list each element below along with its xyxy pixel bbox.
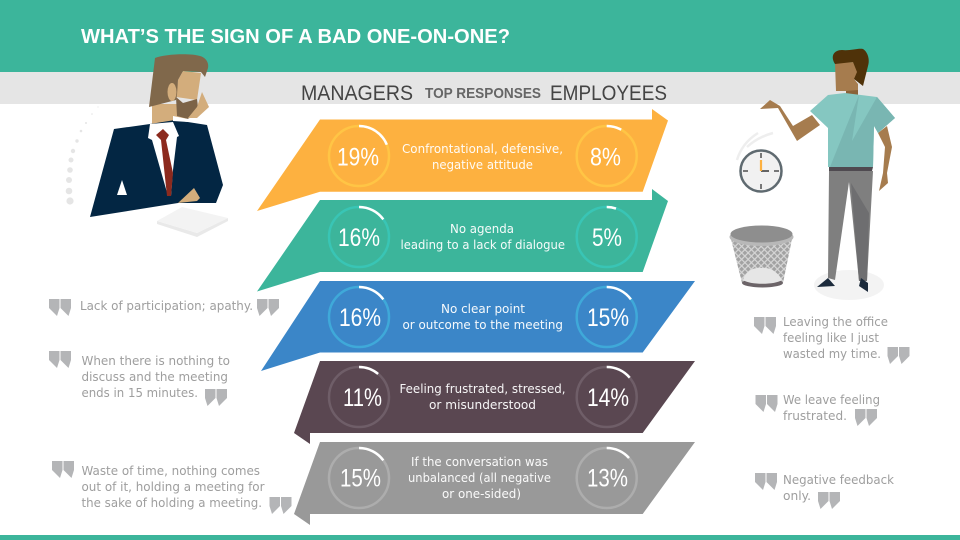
ring: employees 5% — [577, 207, 637, 267]
ring: employees 14%: 14% — [587, 384, 629, 412]
icon: clock — [737, 133, 782, 192]
subheader band — [0, 72, 960, 104]
heading: managers: MANAGERS — [301, 82, 413, 105]
quote: nothing to discuss — [49, 351, 230, 406]
label: No clear point — [441, 302, 525, 316]
label: or misunderstood — [429, 398, 536, 412]
banner: feeling frustrated — [294, 361, 695, 444]
quote: negative feedback: only. — [783, 489, 811, 503]
quote: wasted my time — [754, 315, 910, 364]
quote: nothing to discuss: discuss and the meeting — [82, 370, 228, 384]
ring: employees 8% — [577, 126, 637, 186]
ring: managers 16%: 16% — [339, 304, 381, 332]
quote: waste of time: Waste of time, nothing comes — [82, 464, 260, 478]
label: or one-sided) — [442, 487, 521, 501]
label: negative attitude — [432, 158, 533, 172]
illustration: manager — [66, 54, 228, 237]
ring: employees 15%: 15% — [587, 304, 629, 332]
quote: negative feedback: Negative feedback — [783, 473, 895, 487]
label: No agenda — [450, 222, 514, 236]
label: or outcome to the meeting — [402, 318, 563, 332]
label: leading to a lack of dialogue — [400, 238, 565, 252]
quote: negative feedback — [755, 473, 895, 509]
ring: managers 15%: 15% — [340, 464, 381, 492]
label — [402, 302, 563, 332]
ring: managers 16% — [329, 287, 389, 347]
label: Feeling frustrated, stressed, — [400, 382, 566, 396]
ring: managers 15% — [329, 448, 389, 508]
illustration: employee — [760, 49, 895, 300]
quote: lack of participation: Lack of participation; apathy. — [80, 299, 253, 313]
quote: leave frustrated — [756, 393, 880, 426]
ring: employees 13%: 13% — [587, 464, 628, 492]
label — [400, 382, 566, 412]
ring: employees 14% — [577, 367, 637, 427]
label — [408, 455, 551, 501]
header band — [0, 0, 960, 72]
ring: managers 19%: 19% — [337, 144, 379, 172]
quote: leave frustrated: frustrated. — [783, 409, 847, 423]
heading: top responses: TOP RESPONSES — [425, 85, 541, 102]
quote: lack of participation — [49, 299, 279, 316]
label: unbalanced (all negative — [408, 471, 551, 485]
quote: waste of time: the sake of holding a meeting. — [82, 496, 262, 510]
label — [402, 142, 563, 172]
quote: nothing to discuss: When there is nothing to — [82, 354, 230, 368]
heading: employees: EMPLOYEES — [550, 82, 667, 105]
banner: unbalanced conversation — [294, 442, 695, 525]
quote: wasted my time: feeling like I just — [783, 331, 879, 345]
quote: leave frustrated: We leave feeling — [783, 393, 880, 407]
decorative dotted arc — [66, 106, 99, 205]
label — [400, 222, 565, 252]
title: WHAT’S THE SIGN OF A BAD ONE-ON-ONE? — [81, 25, 510, 48]
ring: managers 11% — [329, 367, 389, 427]
quote: nothing to discuss: ends in 15 minutes. — [82, 386, 198, 400]
ring: employees 13% — [577, 448, 637, 508]
ring: employees 15% — [577, 287, 637, 347]
label: Confrontational, defensive, — [402, 142, 563, 156]
footer band — [0, 535, 960, 540]
ring: managers 11%: 11% — [343, 384, 382, 412]
ring: employees 8%: 8% — [590, 144, 621, 172]
ring: managers 19% — [329, 126, 389, 186]
ring: managers 16% — [329, 207, 389, 267]
banner: no clear point — [261, 281, 695, 371]
icon: waste basket — [730, 226, 794, 288]
quote: wasted my time: Leaving the office — [783, 315, 888, 329]
quote: wasted my time: wasted my time. — [783, 347, 881, 361]
ring: managers 16%: 16% — [338, 224, 380, 252]
banner: confrontational — [257, 109, 668, 211]
quote: waste of time: out of it, holding a meeting for — [82, 480, 265, 494]
label: If the conversation was — [411, 455, 548, 469]
banner: no agenda — [257, 189, 668, 292]
quote: waste of time — [52, 461, 292, 514]
ring: employees 5%: 5% — [592, 224, 622, 252]
